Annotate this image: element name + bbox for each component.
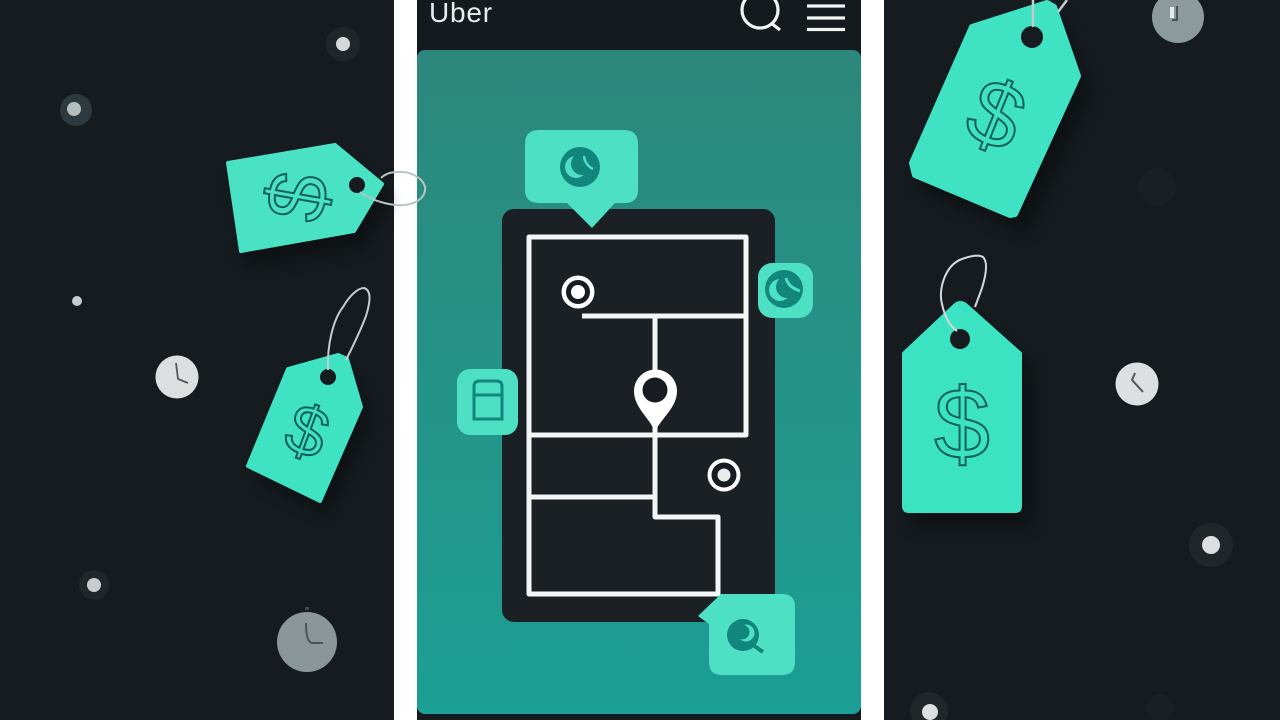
icon: search	[742, 0, 780, 30]
price tag: left vertical	[248, 288, 371, 515]
price tag: left vertical: $	[276, 388, 339, 474]
icon: menu	[807, 6, 845, 30]
callout: bottom search	[698, 594, 795, 675]
price tag: right bottom: $	[934, 368, 990, 480]
price tag: left horizontal	[228, 145, 425, 267]
price tag: right top	[912, 0, 1091, 233]
callout: top clock	[525, 130, 638, 228]
clock: bottom left	[277, 607, 337, 672]
destination marker	[708, 458, 740, 492]
price tag: right top: $	[953, 58, 1039, 172]
clock: top right	[1152, 0, 1204, 43]
callout: right phone	[758, 263, 813, 318]
map panel	[502, 209, 775, 622]
app screen	[417, 50, 861, 714]
clock: right middle	[1116, 362, 1158, 406]
price tag: right bottom	[903, 256, 1032, 527]
phone	[394, 0, 884, 720]
pin marker	[634, 370, 677, 432]
map route lines	[529, 237, 746, 594]
clock: left middle	[156, 356, 198, 398]
price tag: left horizontal: $	[247, 166, 347, 228]
origin marker	[562, 276, 594, 308]
callout: left lock	[457, 369, 518, 435]
faint background dots	[1138, 168, 1176, 720]
